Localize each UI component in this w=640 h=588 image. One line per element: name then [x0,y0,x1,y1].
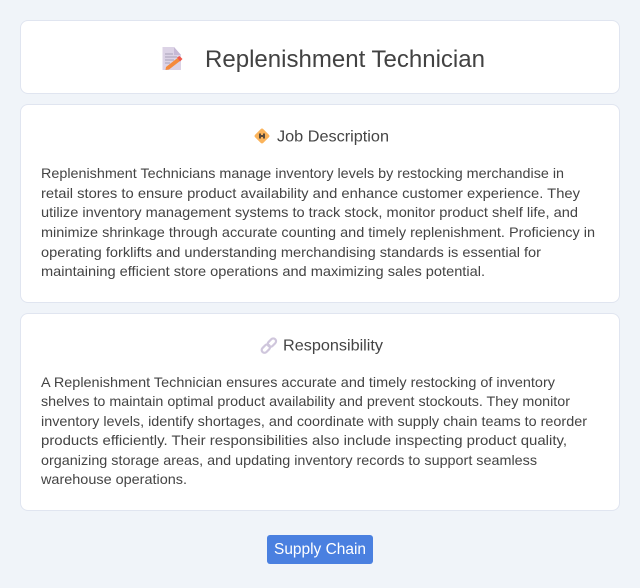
button: supply chain: Supply Chain [274,541,366,558]
text block: job description: retail stores to ensure product availability and enhance customer experience. They [41,185,580,201]
icon: chain link [260,337,278,354]
text block: job description: minimize shrinkage through accurate counting and timely replenishment. Proficiency in [41,224,595,240]
text block: responsibility: organizing storage areas, and updating inventory records to support seamless [41,452,537,468]
heading: responsibility: Responsibility [283,338,383,354]
text block: job description: utilize inventory management systems to track stock, monitor product shelf life, and [41,204,578,220]
text block: job description: maintaining efficient store operations and maximizing sales potential. [41,263,485,279]
text block: job description: Replenishment Technicians manage inventory levels by restocking merchandise in [41,165,564,181]
text block: job description [41,165,595,279]
text block: responsibility: products efficiently. Their responsibilities also include inspecting product quality, [41,432,567,448]
text block: responsibility [40,374,587,487]
panel: job description [20,104,620,303]
icon: document with pencil [162,47,182,70]
panel: responsibility [20,313,620,511]
text block: responsibility: A Replenishment Technician ensures accurate and timely restocking of inventory [41,374,555,390]
panel: title [20,20,620,94]
text block: job description: operating forklifts and understanding merchandising standards is essential for [41,244,541,260]
text block: responsibility: warehouse operations. [40,471,187,487]
heading: title: Replenishment Technician [205,46,485,73]
heading: job description: Job Description [277,128,389,146]
button: supply chain [267,535,373,564]
text block: responsibility: inventory levels, identify shortages, and coordinate with supply chain teams to reorder [41,413,587,429]
text block: responsibility: shelves to maintain optimal product availability and prevent stockouts. They monitor [41,393,570,409]
icon: diamond road sign [254,128,270,144]
